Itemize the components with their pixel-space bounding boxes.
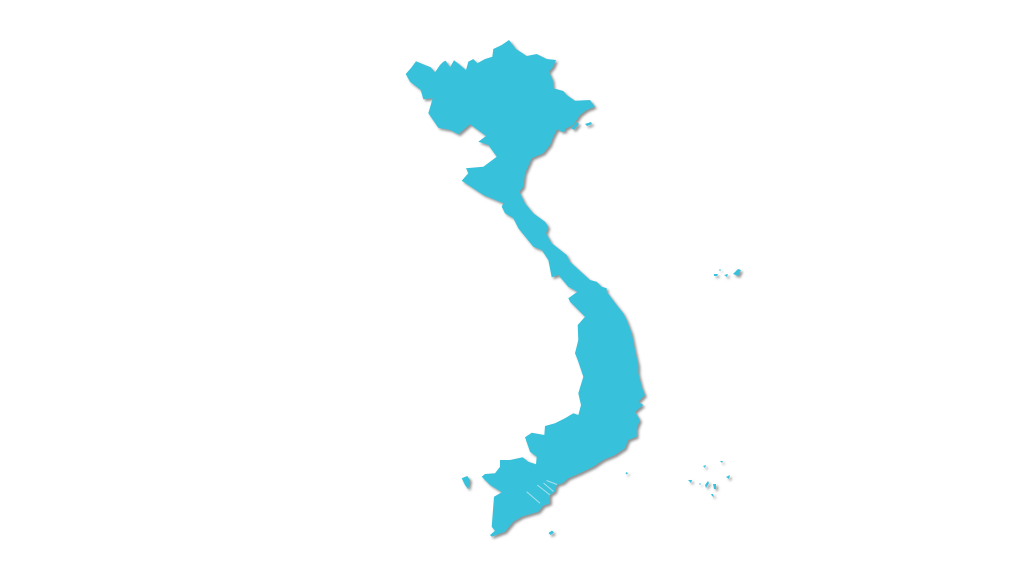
- islands: Ha Long Bay: [559, 122, 592, 132]
- island: Phu Quoc: [462, 476, 470, 489]
- mainland: [406, 40, 645, 537]
- islands: Paracel: [714, 269, 741, 277]
- map: Vietnam: [406, 40, 741, 537]
- rivers: Mekong delta channels: [527, 480, 557, 503]
- islands: Spratly: [688, 461, 730, 497]
- island: Phu Quy: [626, 472, 628, 474]
- island: Con Dao: [548, 530, 554, 535]
